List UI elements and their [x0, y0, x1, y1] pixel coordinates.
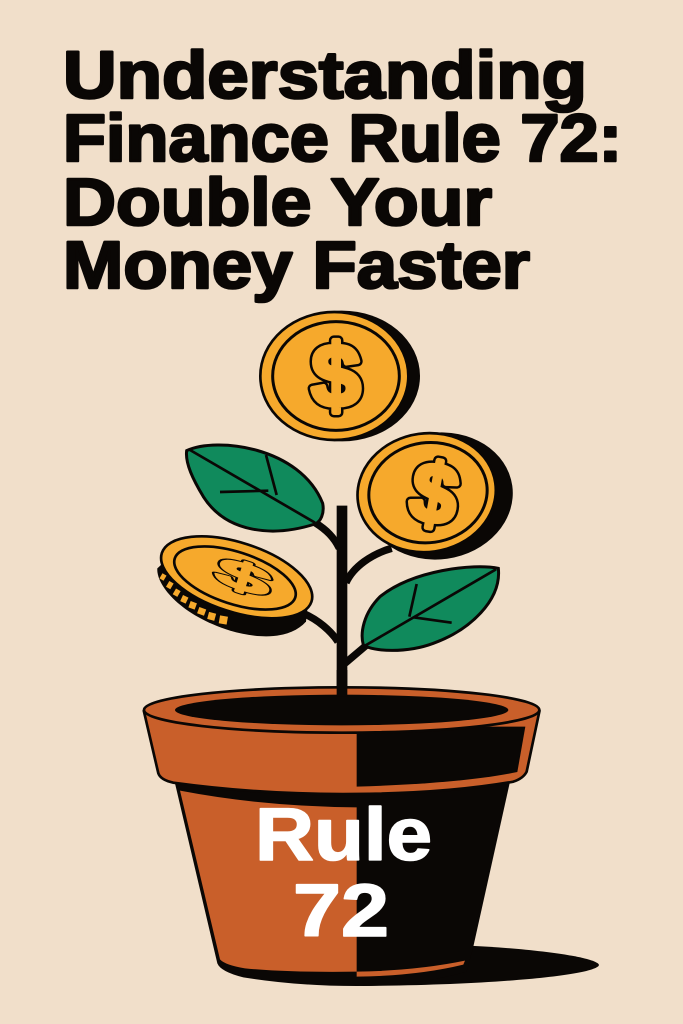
ground shadow: [263, 945, 599, 986]
pot label: [255, 793, 432, 952]
right coin: $: [403, 444, 465, 543]
pot rim top: [144, 670, 539, 733]
top coin: $: [311, 326, 361, 425]
lower right leaf: [362, 567, 499, 650]
pot label: 72: [293, 869, 389, 952]
plant with coins and leaves: [151, 311, 521, 700]
title: [63, 38, 622, 303]
top coin: $: [311, 326, 361, 425]
flower pot: [144, 670, 599, 986]
pot body: [175, 782, 510, 986]
top left leaf: [186, 445, 323, 531]
bottom left tilted coin: $: [210, 549, 276, 606]
pot rim band: [144, 712, 539, 794]
stem and branches: [303, 506, 392, 700]
bottom left tilted coin: [151, 520, 322, 636]
title: Finance Rule 72:: [63, 101, 622, 176]
right coin: $: [403, 444, 465, 543]
pot label: Rule: [255, 793, 432, 876]
title: Understanding: [63, 38, 587, 113]
title: Money Faster: [63, 228, 530, 303]
bottom left tilted coin: $: [210, 549, 276, 606]
top coin: [260, 311, 420, 441]
right coin: [350, 423, 521, 569]
title: Double Your: [63, 165, 492, 240]
